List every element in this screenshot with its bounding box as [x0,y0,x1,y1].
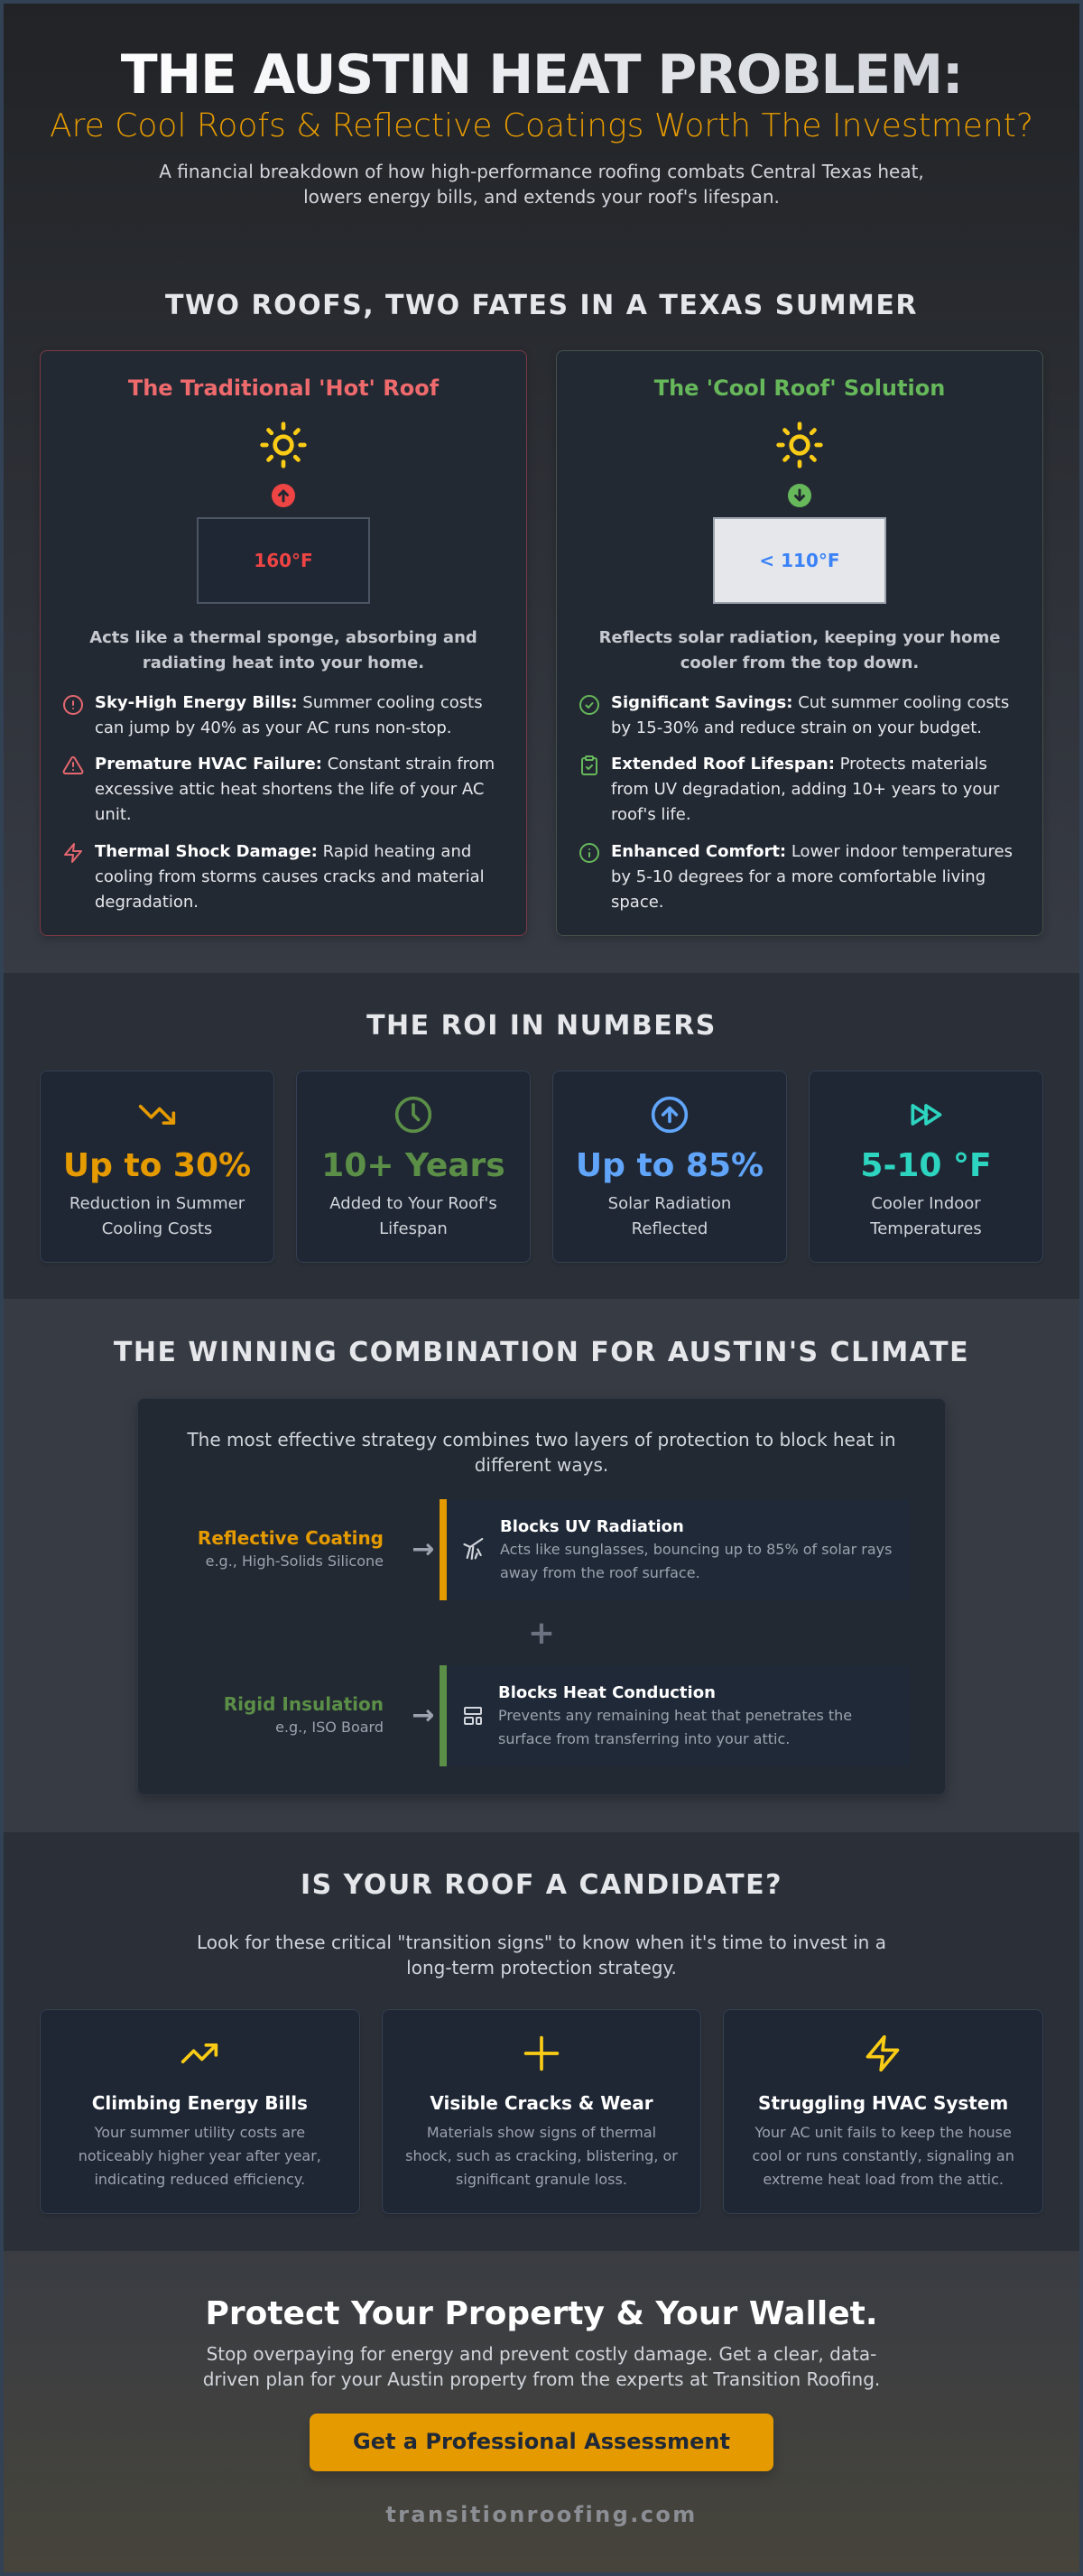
cta paragraph [203,2343,880,2390]
icon: arrow up circle [652,1096,688,1134]
cta heading: Protect Your Property & Your Wallet. [205,2295,878,2332]
icon: sun [260,422,307,468]
icon: layout layers [464,1707,482,1725]
icon: check circle [579,695,599,715]
cta paragraph: driven plan for your Austin property from the experts at Transition Roofing. [203,2368,880,2390]
hot roof description: Acts like a thermal sponge, absorbing and radiating heat into your home. [89,628,477,672]
website: transitionroofing.com [385,2502,698,2527]
candidate intro: Look for these critical "transition signs" to know when it's time to invest in a [197,1932,886,1953]
title [4,48,1079,102]
item: energy bills: Sky-High Energy Bills: Summer cooling costs can jump by 40% as your AC runs non-stop. [95,693,483,737]
candidate intro: long-term protection strategy. [406,1957,677,1978]
stat label: Solar Radiation Reflected [608,1194,731,1238]
benefit title: Blocks UV Radiation [500,1517,684,1536]
cta button [310,2414,773,2471]
intro paragraph: A financial breakdown of how high-performance roofing combats Central Texas heat, [159,161,924,182]
section: roi in numbers [4,973,1079,1299]
layer name: Rigid Insulation [224,1693,384,1715]
title: THE AUSTIN HEAT PROBLEM: [121,43,962,107]
cool roof description: Reflects solar radiation, keeping your home cooler from the top down. [599,628,1000,672]
cta paragraph: Stop overpaying for energy and prevent costly damage. Get a clear, data- [207,2343,876,2365]
icon: heat radiating up [272,484,295,507]
section: two roofs [40,290,1043,939]
item: hvac failure: Premature HVAC Failure: Constant strain from excessive attic heat shortens the life of your AC unit. [95,755,495,824]
benefit description: away from the roof surface. [500,1564,700,1581]
stat value: Up to 30% [63,1147,251,1184]
card title: Struggling HVAC System [758,2092,1008,2114]
hot roof temperature box: 160°F [254,550,313,571]
stat label: Cooler Indoor Temperatures [870,1194,982,1238]
section: candidate [4,1832,1079,2251]
cool roof temperature box: < 110°F [759,550,840,571]
benefit description [498,1707,852,1747]
stat value: 10+ Years [321,1147,505,1184]
benefit title: Blocks Heat Conduction [498,1683,716,1702]
icon: heat reflected down [788,484,811,507]
arrow: → [412,1700,435,1731]
stat card: lifespan [296,1070,531,1263]
arrow: → [412,1534,435,1565]
heading: candidate: IS YOUR ROOF A CANDIDATE? [301,1869,782,1901]
hot roof heading: The Traditional 'Hot' Roof [128,375,439,401]
icon: trending down [139,1105,175,1125]
intro paragraph: lowers energy bills, and extends your roof's lifespan. [303,186,780,208]
card description: Your summer utility costs are noticeably higher year after year, indicating reduced efficiency. [79,2124,321,2188]
icon: zap [866,2034,899,2072]
benefit description: Acts like sunglasses, bouncing up to 85% of solar rays [500,1541,892,1558]
item: roof lifespan: Extended Roof Lifespan: Protects materials from UV degradation, adding 10+ years to your roof's life. [611,755,999,824]
cool roof temperature box [713,517,886,604]
icon: clock [395,1096,431,1134]
card: climbing bills [40,2009,360,2214]
layer example: e.g., ISO Board [275,1719,384,1736]
plus sign: + [528,1615,555,1652]
item: savings: Significant Savings: Cut summer cooling costs by 15-30% and reduce strain on your budget. [611,693,1009,737]
stat label: Reduction in Summer Cooling Costs [69,1194,245,1238]
section: call to action [203,2295,880,2527]
stat card: solar reflected [552,1070,787,1263]
layer example: e.g., High-Solids Silicone [206,1552,384,1570]
icon: sun [776,422,823,468]
icon: zap [64,843,82,863]
intro paragraph [159,161,924,208]
layer name: Reflective Coating [198,1527,384,1549]
hot roof temperature box [197,517,370,604]
combination intro: The most effective strategy combines two layers of protection to block heat in different ways. [187,1429,896,1476]
cta button: Get a Professional Assessment [353,2429,730,2454]
heading: two roofs: TWO ROOFS, TWO FATES IN A TEXAS SUMMER [165,290,918,321]
icon: radiation deflected [463,1538,484,1560]
stat card: indoor temperatures [809,1070,1043,1263]
icon: trending up [180,2043,218,2063]
item: thermal shock: Thermal Shock Damage: Rapid heating and cooling from storms causes cracks and material degradation. [95,842,485,912]
icon: alert circle [63,695,83,715]
row: reflective coating [198,1499,892,1600]
icon: info [579,843,599,863]
card: struggling hvac [723,2009,1043,2214]
stat label: Added to Your Roof's Lifespan [329,1194,497,1238]
benefit description: surface from transferring into your attic. [498,1730,790,1747]
card description: Your AC unit fails to keep the house cool or runs constantly, signaling an extreme heat load from the attic. [752,2124,1014,2188]
row: rigid insulation [224,1665,852,1766]
item: comfort: Enhanced Comfort: Lower indoor temperatures by 5-10 degrees for a more comfortable living space. [611,842,1013,912]
card description: Materials show signs of thermal shock, such as cracking, blistering, or significant granule loss. [405,2124,678,2188]
candidate intro [197,1932,886,1978]
panel: combination [137,1398,946,1795]
heading: roi: THE ROI IN NUMBERS [366,1010,717,1042]
subtitle: Are Cool Roofs & Reflective Coatings Worth The Investment? [50,107,1033,144]
panel: traditional hot roof [40,350,527,936]
icon: fast forward [912,1104,942,1126]
stat value: Up to 85% [576,1147,764,1184]
icon: crack cross [523,2036,560,2071]
stat card: cooling costs [40,1070,274,1263]
cool roof heading: The 'Cool Roof' Solution [654,375,945,401]
card: cracks and wear [382,2009,701,2214]
icon: clipboard check [581,755,597,775]
header [50,43,1033,208]
icon: alert triangle [63,756,83,774]
heading: winning combination: THE WINNING COMBINATION FOR AUSTIN'S CLIMATE [114,1337,969,1368]
benefit description [500,1541,892,1581]
benefit description: Prevents any remaining heat that penetrates the [498,1707,852,1724]
card title: Climbing Energy Bills [92,2092,308,2114]
section: winning combination [114,1337,969,1802]
card title: Visible Cracks & Wear [430,2092,653,2114]
stat value: 5-10 °F [860,1147,992,1184]
panel: cool roof solution [556,350,1043,936]
